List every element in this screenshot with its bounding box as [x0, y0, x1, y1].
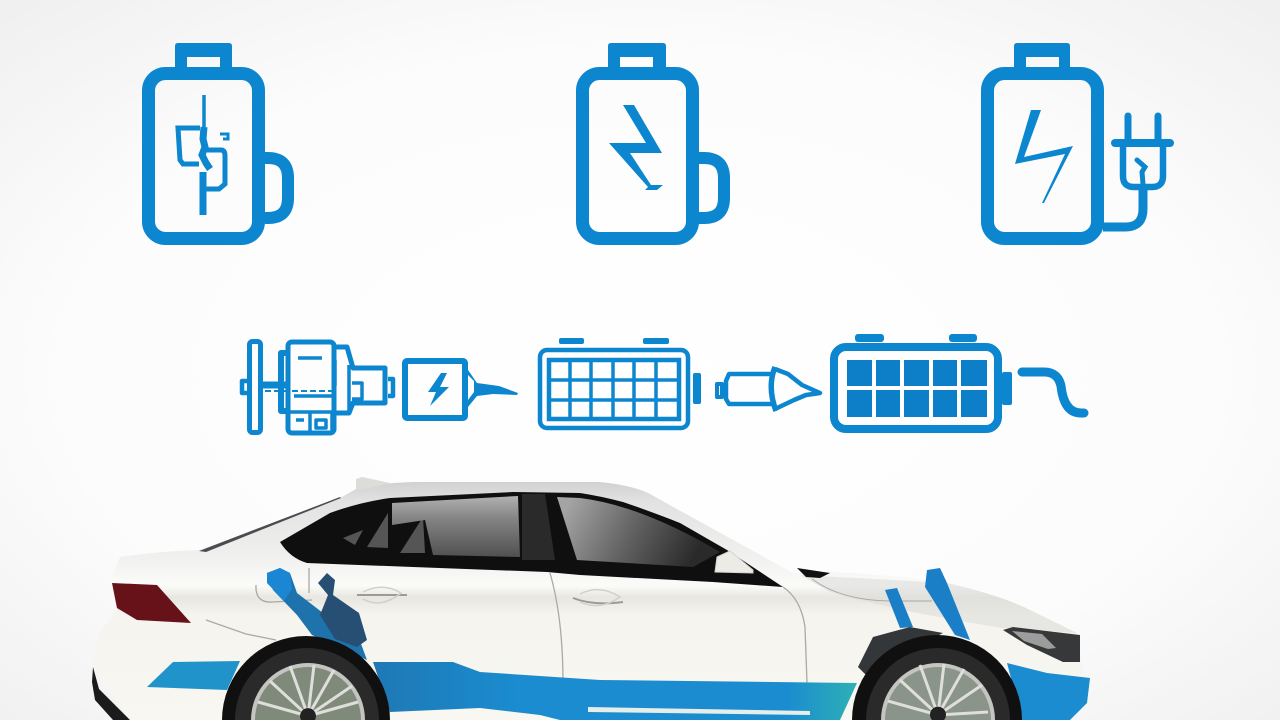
- front wheel arch: [858, 627, 943, 682]
- blue front stripes: [885, 568, 970, 640]
- spokes: [888, 664, 988, 715]
- blue front underbody: [1007, 663, 1090, 720]
- icon: battery pack outlined grid: [540, 338, 701, 428]
- wiper: [797, 568, 830, 578]
- icon: connector arrow: [717, 367, 820, 411]
- icon: battery with bolt and plug: [988, 43, 1170, 238]
- window surround: [280, 492, 783, 587]
- car illustration: [92, 477, 1090, 720]
- rear spoiler edge: [199, 497, 341, 552]
- blue rear sill: [147, 661, 240, 690]
- hood shading: [800, 575, 1077, 633]
- rear door glass: [392, 496, 520, 557]
- front wheel: [852, 635, 1022, 720]
- spokes: [258, 665, 358, 716]
- icon: battery with circuit symbol: [148, 43, 288, 238]
- hood line: [812, 579, 932, 601]
- icon: charger box with bolt: [405, 361, 518, 418]
- blue rear motor left arm: [267, 568, 367, 660]
- icon: output cable: [1022, 372, 1084, 413]
- rear motor right arm: [318, 573, 367, 647]
- icon: charger nozzle: [468, 370, 518, 407]
- rear quarter glass: [343, 513, 425, 553]
- icon: electric motor: [242, 342, 393, 433]
- icon: plug: [1103, 116, 1170, 227]
- front door glass: [557, 497, 720, 567]
- rear bumper shadow: [92, 667, 130, 720]
- headlight highlight: [1012, 631, 1056, 649]
- door lines and handles: [206, 568, 807, 720]
- rear motor bright cap: [267, 568, 292, 601]
- rear wheel: [222, 636, 390, 720]
- car body: [93, 482, 1090, 720]
- door pillar: [522, 494, 555, 560]
- battery cells: [847, 360, 987, 417]
- floor band highlight: [588, 707, 810, 715]
- tail light: [112, 583, 191, 623]
- icon: battery with zigzag bolt: [582, 43, 724, 238]
- shark fin antenna: [356, 477, 390, 490]
- blue floor battery band: [373, 662, 857, 720]
- headlight: [1003, 627, 1080, 662]
- icon: solid battery pack: [834, 334, 1084, 429]
- side mirror: [715, 551, 753, 573]
